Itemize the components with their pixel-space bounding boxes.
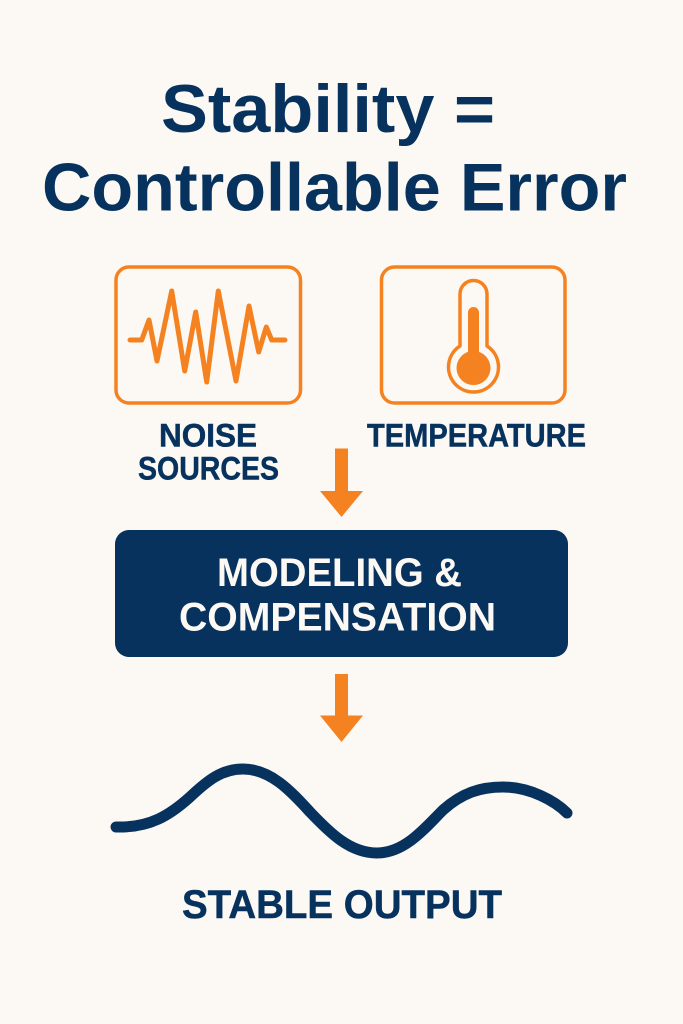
title: Controllable Error bbox=[42, 150, 627, 226]
arrow: modeling to output bbox=[320, 674, 363, 742]
icon: noise waveform box bbox=[116, 267, 300, 403]
label: noise sources: NOISE bbox=[159, 418, 257, 454]
label: modeling and compensation: COMPENSATION bbox=[179, 596, 496, 640]
panel: noise sources bbox=[116, 267, 300, 486]
icon: thermometer box bbox=[382, 267, 565, 403]
panel: temperature bbox=[367, 267, 586, 454]
label: temperature: TEMPERATURE bbox=[367, 418, 586, 454]
label: modeling and compensation: MODELING & bbox=[217, 551, 462, 595]
panel: modeling and compensation bbox=[115, 530, 568, 657]
title: Stability = bbox=[161, 71, 495, 147]
label: noise sources bbox=[138, 418, 279, 486]
title bbox=[42, 71, 627, 226]
chart: stable output wave bbox=[116, 769, 567, 853]
label: stable output: STABLE OUTPUT bbox=[182, 883, 502, 927]
label: modeling and compensation bbox=[179, 551, 496, 640]
arrow: inputs to modeling bbox=[320, 448, 363, 517]
label: noise sources: SOURCES bbox=[138, 450, 279, 486]
